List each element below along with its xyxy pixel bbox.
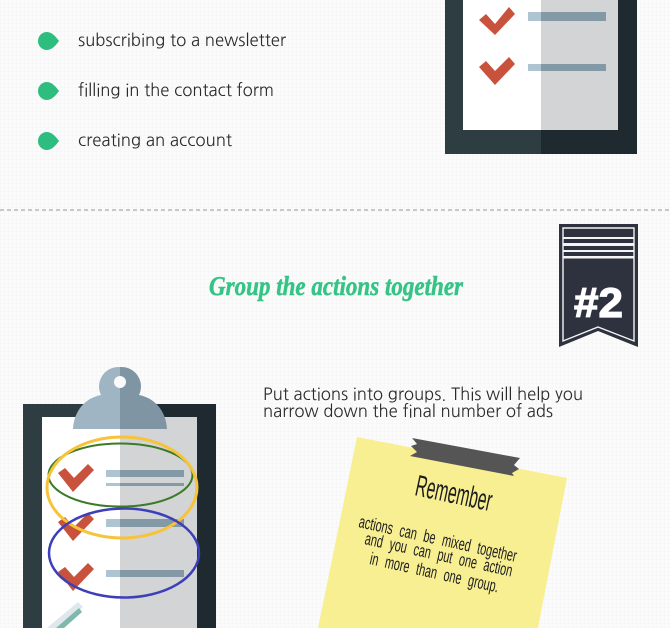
- icon: clipboard with circled groups: [23, 367, 216, 628]
- bullet list of actions: [38, 32, 287, 150]
- note body: actions can be mixed together: [357, 513, 519, 567]
- green ellipse: [48, 444, 192, 506]
- bullet: contact form: [38, 82, 59, 100]
- note body: in more than one group.: [368, 550, 500, 597]
- yellow ellipse: [47, 437, 197, 538]
- note heading: Remember: [412, 469, 495, 518]
- text: newsletter: subscribing to a newsletter: [78, 32, 287, 49]
- bullet: account: [38, 132, 59, 150]
- tape: [410, 438, 520, 476]
- text: put actions into groups: Put actions into groups. This will help you: [263, 386, 583, 403]
- sticky note: [318, 437, 567, 628]
- bullet: newsletter: [38, 32, 59, 50]
- note body: [357, 513, 519, 597]
- icon: clipboard top: [445, 0, 637, 154]
- blue ellipse: [49, 508, 199, 598]
- heading: group the actions: Group the actions together: [209, 271, 463, 301]
- note body: and you can put one action: [363, 530, 514, 581]
- pencil: [47, 602, 83, 628]
- text: contact form: filling in the contact form: [78, 82, 274, 99]
- badge: number 2: [559, 224, 638, 347]
- text: account: creating an account: [78, 132, 233, 149]
- badge label: #2: [574, 279, 623, 326]
- text: put actions into groups: narrow down the final number of ads: [263, 403, 553, 420]
- clip: [73, 367, 167, 429]
